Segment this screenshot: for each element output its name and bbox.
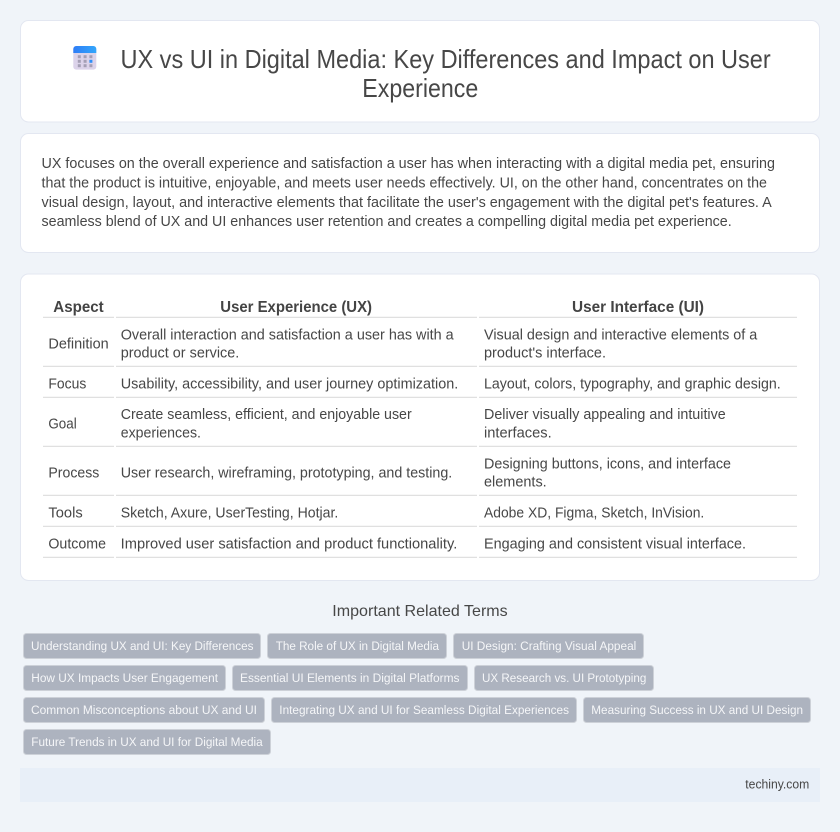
table row: goal: experiences. [121,425,201,441]
text block: summary: that the product is intuitive, enjoyable, and meets user needs effectively. UI, on the other hand, concentrates on the [42,175,767,191]
title [120,46,771,103]
table header row: User Experience (UX) [220,299,372,316]
text block: summary: visual design, layout, and interactive elements that facilitate the user's engagement with the digital pet's features. A [42,195,772,211]
tag: research vs prototyping: UX Research vs. UI Prototyping [482,671,646,685]
table row: outcome: Engaging and consistent visual interface. [484,536,746,552]
related terms tags [24,634,810,754]
table row: tools: Tools [48,505,83,521]
table row: outcome [48,536,746,552]
tag: measuring success [584,698,810,722]
tag: integrating [272,698,576,722]
table header row [53,299,704,316]
table row: goal: Create seamless, efficient, and enjoyable user [121,407,412,423]
table row: focus [48,376,781,392]
panel: summary paragraph [20,134,820,252]
table row: definition: Definition [48,336,109,352]
table row: tools [48,505,704,521]
table row: definition: product's interface. [484,345,606,361]
tag: research vs prototyping [474,666,654,690]
table row: focus: Usability, accessibility, and user journey optimization. [121,376,458,392]
table row: focus: Layout, colors, typography, and graphic design. [484,376,781,392]
table row: definition: product or service. [121,345,239,361]
title: Experience [362,75,478,103]
title: UX vs UI in Digital Media: Key Differences and Impact on User [120,46,771,74]
tag: role of UX: The Role of UX in Digital Media [276,639,439,653]
panel: comparison table [20,274,820,580]
tag: engagement [24,666,226,690]
tag: understanding [24,634,260,658]
table row: goal: Goal [48,416,77,432]
table row: process: Designing buttons, icons, and interface [484,456,731,472]
text block: summary [42,156,775,230]
footer [20,768,820,802]
icon: calendar [73,46,96,70]
heading: important related terms: Important Related Terms [332,603,508,620]
tag: engagement: How UX Impacts User Engagement [31,671,219,685]
tag: understanding: Understanding UX and UI: Key Differences [31,639,254,653]
table row: outcome: Outcome [48,536,106,552]
footer: techiny.com [745,777,809,792]
tag: UI elements: Essential UI Elements in Digital Platforms [240,671,460,685]
tag: UI design: UI Design: Crafting Visual Appeal [462,639,636,653]
tag: UI elements [232,666,468,690]
tag: future trends: Future Trends in UX and UI for Digital Media [31,735,263,749]
tag: integrating: Integrating UX and UI for Seamless Digital Experiences [279,703,569,717]
panel: header [20,20,820,122]
tag: misconceptions [24,698,264,722]
tag: future trends [24,730,270,754]
table header row: Aspect [53,299,104,316]
table row: process [48,456,731,490]
text block: summary: seamless blend of UX and UI enhances user retention and creates a compelling digital media pet experience. [42,214,732,230]
table row: definition: Visual design and interactive elements of a [484,327,758,343]
table row: focus: Focus [48,376,86,392]
table row: process: User research, wireframing, prototyping, and testing. [121,465,452,481]
table row: process: Process [48,465,99,481]
table row: outcome: Improved user satisfaction and product functionality. [121,536,457,552]
table row: goal [48,407,726,441]
tag: role of UX [268,634,446,658]
table row: definition: Overall interaction and satisfaction a user has with a [121,327,455,343]
tag: measuring success: Measuring Success in UX and UI Design [591,703,803,717]
tag: misconceptions: Common Misconceptions about UX and UI [31,703,257,717]
table row: goal: interfaces. [484,425,552,441]
table header row: User Interface (UI) [572,299,704,316]
text block: summary: UX focuses on the overall experience and satisfaction a user has when interacting with a digital media pet, ensuring [42,156,775,172]
table row: process: elements. [484,474,547,490]
table row: tools: Sketch, Axure, UserTesting, Hotjar. [121,505,338,521]
table row: goal: Deliver visually appealing and intuitive [484,407,726,423]
table row: tools: Adobe XD, Figma, Sketch, InVision. [484,505,704,521]
table row: definition [48,327,758,361]
tag: UI design [454,634,644,658]
